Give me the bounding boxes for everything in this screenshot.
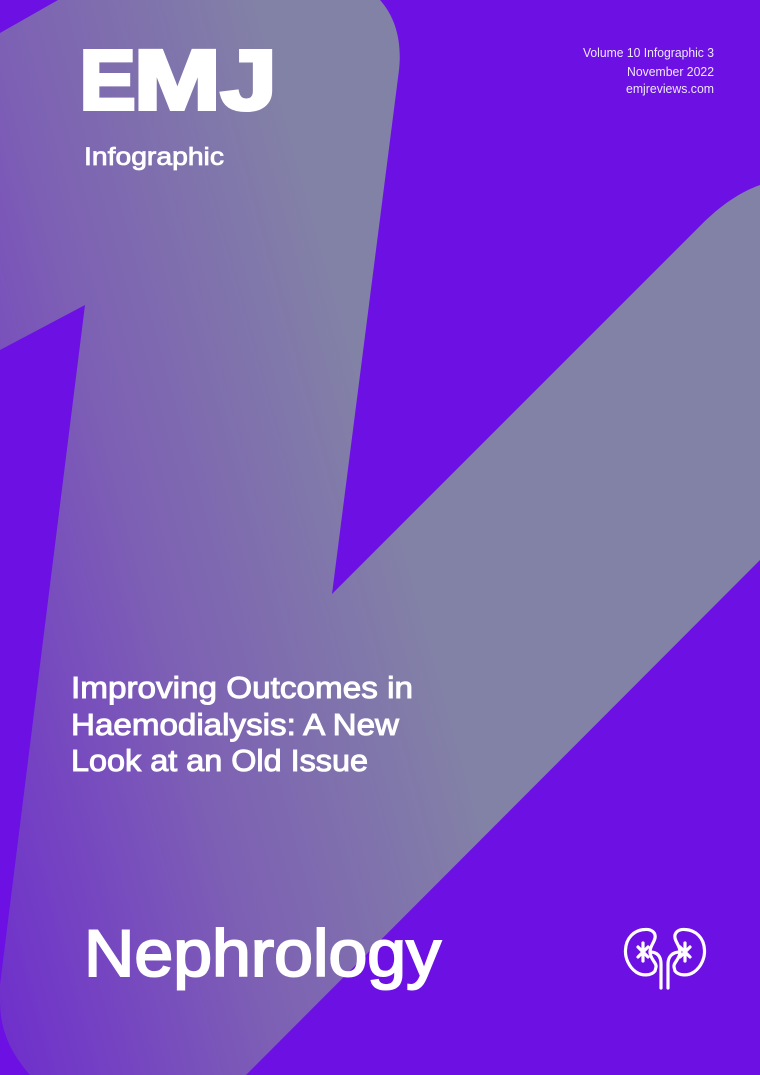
issue details: November 2022 <box>627 65 714 79</box>
article title: Improving Outcomes in <box>71 670 413 705</box>
issue details: Volume 10 Infographic 3 <box>583 46 714 60</box>
logo: EMJ: M <box>134 33 220 127</box>
logo: EMJ: E <box>80 33 136 127</box>
issue details <box>583 46 714 96</box>
icon: kidneys <box>625 929 705 988</box>
label: Infographic: Infographic <box>84 143 224 171</box>
logo: EMJ <box>80 33 277 127</box>
article title: Look at an Old Issue <box>71 743 368 778</box>
logo: EMJ: J <box>221 33 277 127</box>
issue details: emjreviews.com <box>626 82 714 96</box>
section name: Nephrology: Nephrology <box>84 916 441 990</box>
article title <box>71 670 413 778</box>
article title: Haemodialysis: A New <box>71 707 400 742</box>
